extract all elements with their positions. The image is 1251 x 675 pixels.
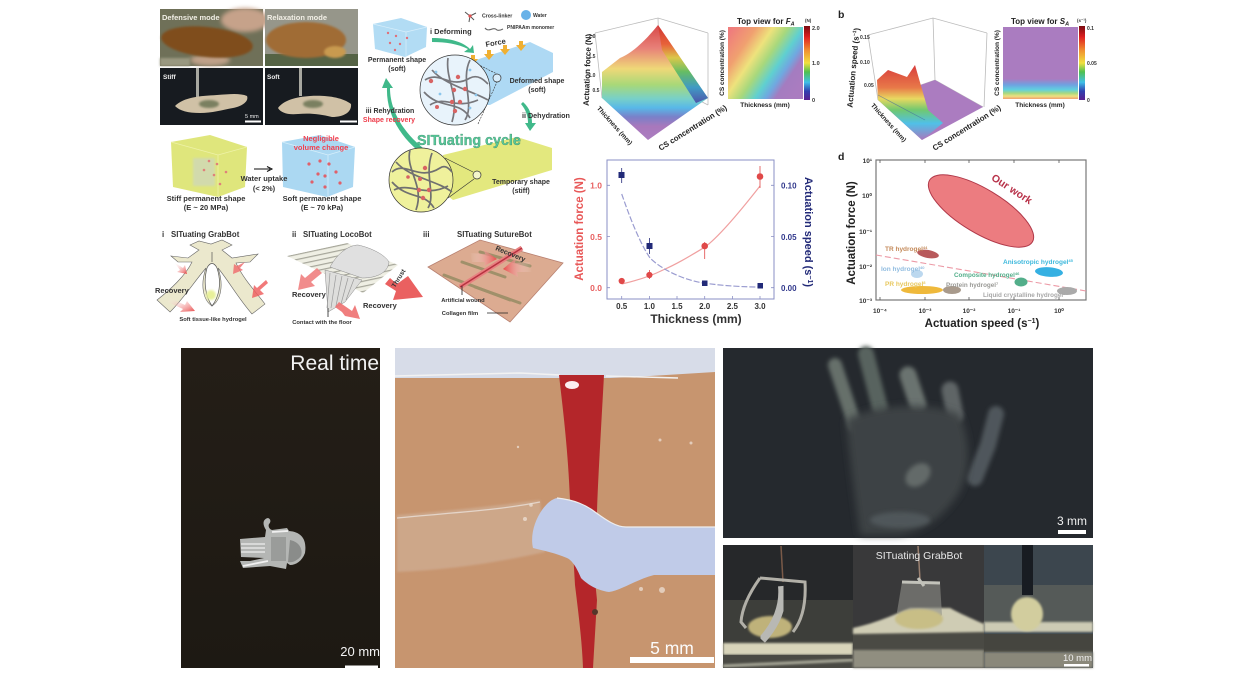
- heatmap: force: [728, 27, 803, 99]
- icon: stiff network inset: [389, 148, 481, 212]
- scale bar: 10 mm: [1064, 664, 1089, 666]
- axis title: actuation speed: ): [802, 283, 814, 287]
- label: deformed shape: Deformed shape: [510, 78, 564, 85]
- axis: x tick labels: 10⁻¹: [1008, 308, 1020, 315]
- axis label: thickness: Thickness (mm): [1015, 102, 1065, 109]
- photo: hand-shaped hydrogel close-up: [723, 348, 1093, 538]
- label: water uptake: Water uptake: [241, 174, 287, 183]
- axis title: actuation speed: Actuation speed (s: [925, 318, 1028, 330]
- axis label: thickness: Thickness (mm): [595, 105, 633, 147]
- region: liquid crystalline hydrogel: [983, 287, 1077, 299]
- photo: stiff specimen: Stiff: [163, 74, 176, 81]
- label: temporary shape: Temporary shape: [492, 179, 550, 186]
- heading: top view SA: Top view for S: [1011, 17, 1065, 26]
- scale bar: 3 mm: [1058, 530, 1086, 534]
- label: 20 mm: 20 mm: [340, 644, 380, 659]
- axis: right ticks: 0.05: [781, 233, 797, 242]
- scale bar: 20 mm: [345, 666, 378, 668]
- icon: stiff yellow cube: [171, 135, 247, 197]
- photo: SITuating GrabBot sequence: [723, 545, 1093, 668]
- axis: x tick labels: 10⁻³: [919, 308, 932, 315]
- photo: stiff specimen: 5 mm: [245, 114, 259, 120]
- data: speed points: [619, 168, 762, 288]
- label: 5 mm: 5 mm: [650, 638, 694, 658]
- legend: components: Cross-linker: [482, 14, 512, 20]
- heatmap: speed: [1003, 27, 1078, 99]
- label: ii dehydration: ii Dehydration: [522, 111, 570, 120]
- label: force: Force: [485, 37, 506, 49]
- icon: soft blue cube: [282, 135, 355, 197]
- arrow: recovery left lower: [168, 298, 195, 312]
- label: contact with the floor: Contact with the floor: [292, 320, 353, 326]
- label: soft permanent shape: (E ~ 70 kPa): [301, 203, 344, 212]
- panel: water uptake comparison: [167, 134, 361, 212]
- tick labels: force: 0.5: [593, 88, 600, 94]
- label: recovery: Recovery: [494, 245, 526, 264]
- leader: collagen film: [487, 312, 508, 314]
- axis: x tick labels: 10⁻⁴: [873, 308, 887, 315]
- icon: soft network inset: [420, 55, 501, 125]
- colorbar: speed: 0.1: [1087, 26, 1094, 32]
- region: anisotropic hydrogel: 45: [1068, 258, 1074, 263]
- region: liquid crystalline hydrogel: 2: [1063, 291, 1066, 296]
- panel label: b: b: [838, 9, 844, 21]
- colorbar: force: 2.0: [812, 26, 820, 32]
- region: TR hydrogel: TR hydrogel: [885, 246, 923, 253]
- axis: y tick labels: 10¹: [863, 158, 872, 165]
- label: permanent shape: Permanent shape: [368, 57, 426, 64]
- axis label: CS concentration: CS concentration (%): [657, 103, 729, 153]
- axis: left ticks: 1.0: [590, 180, 602, 190]
- axis: bottom ticks: 2.0: [699, 302, 711, 311]
- tick labels: force: 1.0: [589, 73, 596, 79]
- region: liquid crystalline hydrogel: Liquid crystalline hydrogel: [983, 292, 1063, 299]
- heading: GrabBot: i: [162, 230, 164, 239]
- axis label: thickness: Thickness (mm): [869, 102, 907, 144]
- colorbar: force: 0: [812, 98, 815, 104]
- chart: 3D actuation speed surface: [846, 18, 1003, 153]
- arrow: recovery lower: [503, 258, 532, 277]
- colorbar: force: (N): [805, 18, 812, 23]
- label: iii rehydration: iii Rehydration: [366, 108, 414, 115]
- colorbar: speed: 0: [1087, 98, 1090, 104]
- label: real time: Real time: [290, 352, 379, 375]
- tick labels: speed: 0.15: [860, 35, 870, 41]
- icon: deformed blue slab: [465, 42, 553, 105]
- photo: relaxation mode: [265, 9, 358, 66]
- arrow: recovery right: [335, 302, 360, 319]
- axis: x tick labels: 10⁰: [1054, 307, 1064, 315]
- photo: defensive mode: Defensive mode: [162, 13, 220, 22]
- axis title: actuation speed: −1: [1028, 318, 1036, 325]
- heading: top view FA: Top view for F: [737, 17, 791, 26]
- icon: tissue plate with wound: [428, 240, 563, 322]
- axis: y tick labels: 10⁻³: [859, 298, 873, 305]
- axis: bottom ticks: 3.0: [754, 302, 766, 311]
- axis: left ticks: 0.5: [590, 232, 602, 242]
- callout: negligible volume change: Negligible: [303, 134, 339, 143]
- label: thrust: Thrust: [391, 267, 408, 289]
- tick labels: force: 1.5: [589, 54, 596, 60]
- arrow: recovery upper: [470, 250, 497, 266]
- heading: SITuating cycle: SITuating cycle: [417, 133, 521, 149]
- label: temporary shape: (stiff): [512, 188, 530, 195]
- region: TR hydrogel: 44: [923, 245, 928, 250]
- frame: lifted object: [984, 545, 1093, 668]
- chart: top view for speed: [994, 17, 1097, 109]
- heading: LocoBot: ii: [292, 230, 296, 239]
- arrow: recovery right upper: [233, 262, 245, 274]
- axis title: actuation speed: Actuation speed (s: [802, 177, 814, 275]
- label: deformed shape: (soft): [528, 87, 546, 94]
- axis: right ticks: 0.10: [781, 182, 797, 190]
- label: recovery: Recovery: [155, 286, 190, 295]
- colorbar: speed: (s⁻¹): [1077, 18, 1087, 23]
- axis label: actuation speed: Actuation speed (s: [846, 36, 861, 108]
- region: ion hydrogel: 40: [920, 265, 925, 270]
- axis: bottom ticks: 1.0: [644, 302, 656, 311]
- region: protein hydrogel: 7: [996, 281, 999, 286]
- arrow: rehydration: [382, 78, 427, 156]
- label: soft permanent shape: Soft permanent shape: [283, 194, 361, 203]
- photo: relaxation mode: Relaxation mode: [267, 13, 327, 22]
- region: protein hydrogel: Protein hydrogel: [946, 282, 996, 289]
- region: our work: [918, 161, 1044, 261]
- axis label: CS concentration: CS concentration (%): [719, 30, 726, 96]
- chart: top view for force: [719, 17, 820, 109]
- label: recovery right: Recovery: [363, 301, 398, 310]
- label: soft tissue-like hydrogel: Soft tissue-like hydrogel: [179, 317, 247, 323]
- trend line: [876, 255, 1086, 291]
- label: water uptake: (< 2%): [253, 184, 276, 193]
- icon: permanent shape cube: [373, 18, 427, 57]
- chart: 3D actuation force surface: [582, 18, 729, 153]
- colorbar: force: 1.0: [812, 61, 820, 67]
- region: composite hydrogel: [954, 271, 1028, 286]
- axis title: actuation speed: ): [1036, 318, 1040, 330]
- data: force points: [619, 166, 763, 284]
- axis title: actuation speed: −1: [806, 275, 813, 283]
- icon: gripper: [157, 240, 265, 314]
- axis: y tick labels: 10⁻²: [859, 264, 873, 271]
- icon: hydrogel hand: [240, 518, 305, 569]
- panel: SITuating GrabBot: [155, 230, 268, 323]
- axis: left ticks: 0.0: [590, 283, 602, 293]
- arrow: water uptake: [254, 166, 272, 172]
- icon: striped locomotion sheet: [287, 243, 398, 312]
- axis: x tick labels: 10⁻²: [963, 308, 976, 315]
- region: PR hydrogel: [885, 280, 943, 294]
- leader: contact point: [327, 308, 329, 317]
- label: recovery left: Recovery: [292, 290, 327, 299]
- region: ion hydrogel: [881, 265, 925, 278]
- arrow: recovery left upper: [174, 262, 187, 274]
- photo: suture bot on wound: [395, 348, 715, 668]
- photo: defensive mode: [160, 8, 269, 66]
- arrow: recovery right lower: [252, 280, 268, 298]
- colorbar: speed: [1077, 18, 1097, 104]
- region: anisotropic hydrogel: Anisotropic hydrogel: [1003, 259, 1068, 266]
- panel: sea hare photos: [160, 8, 358, 125]
- colorbar: force: [804, 18, 820, 104]
- film: top strip: [395, 348, 715, 378]
- region: TR hydrogel: [885, 245, 940, 260]
- wound: [559, 375, 604, 668]
- axis title: actuation force: Actuation force (N): [846, 181, 858, 285]
- region: PR hydrogel: 8: [923, 280, 926, 285]
- axis label: actuation force: Actuation force (N): [582, 33, 593, 106]
- glints on film: [517, 438, 692, 593]
- axis: right ticks: 0.00: [781, 284, 797, 293]
- label: our work: Our work: [989, 172, 1034, 207]
- panel: SITuating SutureBot: [423, 230, 563, 322]
- legend: components: PNIPAAm monomer: [507, 25, 554, 31]
- frame: approach: [723, 545, 853, 668]
- photo: soft specimen: Soft: [267, 74, 280, 81]
- arrow: dehydration: [521, 102, 536, 131]
- tick labels: force: 2.0: [589, 34, 595, 40]
- tick labels: speed: 0.10: [860, 60, 870, 66]
- chart: Ashby plot force vs speed: [846, 158, 1086, 330]
- colorbar: speed: 0.05: [1087, 61, 1097, 67]
- axis label: CS concentration: CS concentration (%): [931, 103, 1003, 153]
- leader: wound: [461, 286, 463, 295]
- region: composite hydrogel: 46: [1015, 271, 1020, 276]
- tick labels: speed: 0.05: [864, 83, 874, 89]
- axis label: actuation speed: −1: [852, 30, 858, 36]
- axis title: actuation force: Actuation force (N): [574, 177, 586, 281]
- heading: top view FA: A: [790, 22, 795, 28]
- panel: SITuating cycle: [363, 10, 570, 212]
- icon: force arrows: [468, 41, 526, 65]
- label: 3 mm: 3 mm: [1057, 514, 1087, 528]
- label: artificial wound: Artificial wound: [441, 298, 485, 304]
- label: SITuating GrabBot: SITuating GrabBot: [876, 550, 962, 562]
- label: stiff permanent shape: Stiff permanent shape: [167, 194, 245, 203]
- panel label: d: d: [838, 151, 844, 163]
- heading: GrabBot: SITuating GrabBot: [171, 230, 240, 239]
- arrow: recovery left: [298, 268, 322, 290]
- axis label: CS concentration: CS concentration (%): [994, 30, 1001, 96]
- callout: negligible volume change: volume change: [294, 143, 348, 152]
- chart: force and speed vs thickness: [574, 160, 814, 326]
- axis: bottom ticks: 1.5: [671, 302, 683, 311]
- axis: y tick labels: 10⁰: [862, 192, 872, 200]
- label: i deforming: i Deforming: [430, 27, 472, 36]
- hydrogel patch: [532, 498, 715, 592]
- scale bar: 5 mm: [630, 657, 714, 663]
- label: collagen film: Collagen film: [442, 311, 478, 317]
- heading: LocoBot: SITuating LocoBot: [303, 230, 372, 239]
- label: 10 mm: 10 mm: [1063, 653, 1092, 664]
- photo: hand-shaped robot real time: [181, 348, 380, 668]
- photo: soft specimen: [265, 68, 358, 125]
- region: composite hydrogel: Composite hydrogel: [954, 272, 1015, 279]
- label: stiff permanent shape: (E ~ 20 MPa): [184, 203, 229, 212]
- curve: force fit: [622, 186, 760, 284]
- axis title: thickness: Thickness (mm): [650, 312, 742, 326]
- label: shape recovery: Shape recovery: [363, 117, 415, 124]
- photo: stiff specimen: [160, 68, 263, 125]
- legend: components: [465, 10, 554, 31]
- axis: y tick labels: 10⁻¹: [859, 229, 872, 236]
- axis label: actuation speed: ): [852, 27, 862, 31]
- axis: bottom ticks: 2.5: [727, 302, 739, 311]
- curve: speed fit: [622, 194, 760, 287]
- icon: yellow temporary slab: [440, 137, 552, 200]
- panel: SITuating LocoBot: [287, 230, 423, 326]
- region: anisotropic hydrogel: [1003, 258, 1074, 278]
- axis: bottom ticks: 0.5: [616, 302, 628, 311]
- arrow: thrust: [385, 276, 423, 300]
- region: protein hydrogel: [943, 281, 999, 294]
- region: ion hydrogel: Ion hydrogel: [881, 266, 920, 273]
- region: PR hydrogel: PR hydrogel: [885, 281, 923, 288]
- label: permanent shape: (soft): [388, 66, 406, 73]
- heading: SutureBot: iii: [423, 230, 430, 239]
- heading: SutureBot: SITuating SutureBot: [457, 230, 532, 239]
- frame: grasp: [853, 545, 984, 668]
- axis label: thickness: Thickness (mm): [740, 102, 790, 109]
- arrow: deforming: [432, 38, 474, 53]
- legend: components: Water: [533, 13, 547, 19]
- heading: top view SA: A: [1064, 22, 1069, 28]
